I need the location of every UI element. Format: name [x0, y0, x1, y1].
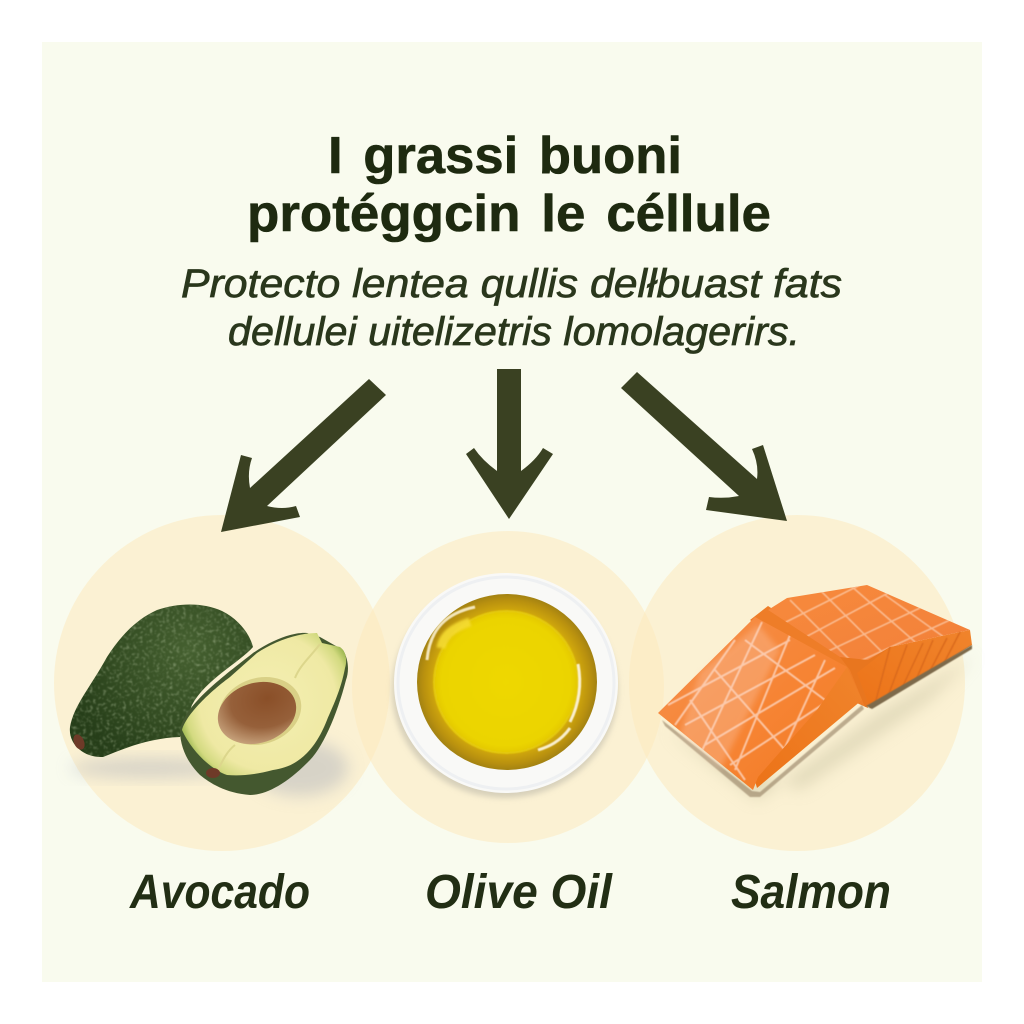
title: [247, 127, 771, 243]
circle: olive oil backdrop: [352, 531, 664, 843]
olive oil: [417, 594, 597, 770]
subtitle: Protecto lentea qullis delłbuast fats: [181, 262, 842, 306]
icon: salmon: [658, 585, 975, 800]
label: salmon: Salmon: [731, 866, 891, 919]
arrow: to avocado: [221, 379, 386, 532]
arrow: to olive oil: [466, 369, 553, 519]
arrow: to salmon: [621, 372, 787, 521]
labels: [129, 866, 891, 919]
whole avocado: [70, 604, 253, 757]
salmon front fillet: [658, 617, 864, 797]
circle: avocado backdrop: [54, 515, 390, 851]
half avocado: [180, 633, 348, 795]
circle: salmon backdrop: [629, 515, 965, 851]
label: avocado: Avocado: [129, 866, 310, 919]
subtitle: [181, 262, 842, 354]
title: I grassi buoni: [328, 127, 682, 185]
avocado pit: [210, 672, 304, 754]
salmon back fillet: [750, 585, 972, 709]
icon: avocado: [70, 604, 348, 796]
icon: olive oil bowl: [392, 573, 618, 798]
label: olive oil: Olive Oil: [425, 866, 614, 919]
subtitle: dellulei uitelizetris lomolagerirs.: [228, 310, 800, 354]
title: protéggcin le céllule: [247, 185, 771, 243]
